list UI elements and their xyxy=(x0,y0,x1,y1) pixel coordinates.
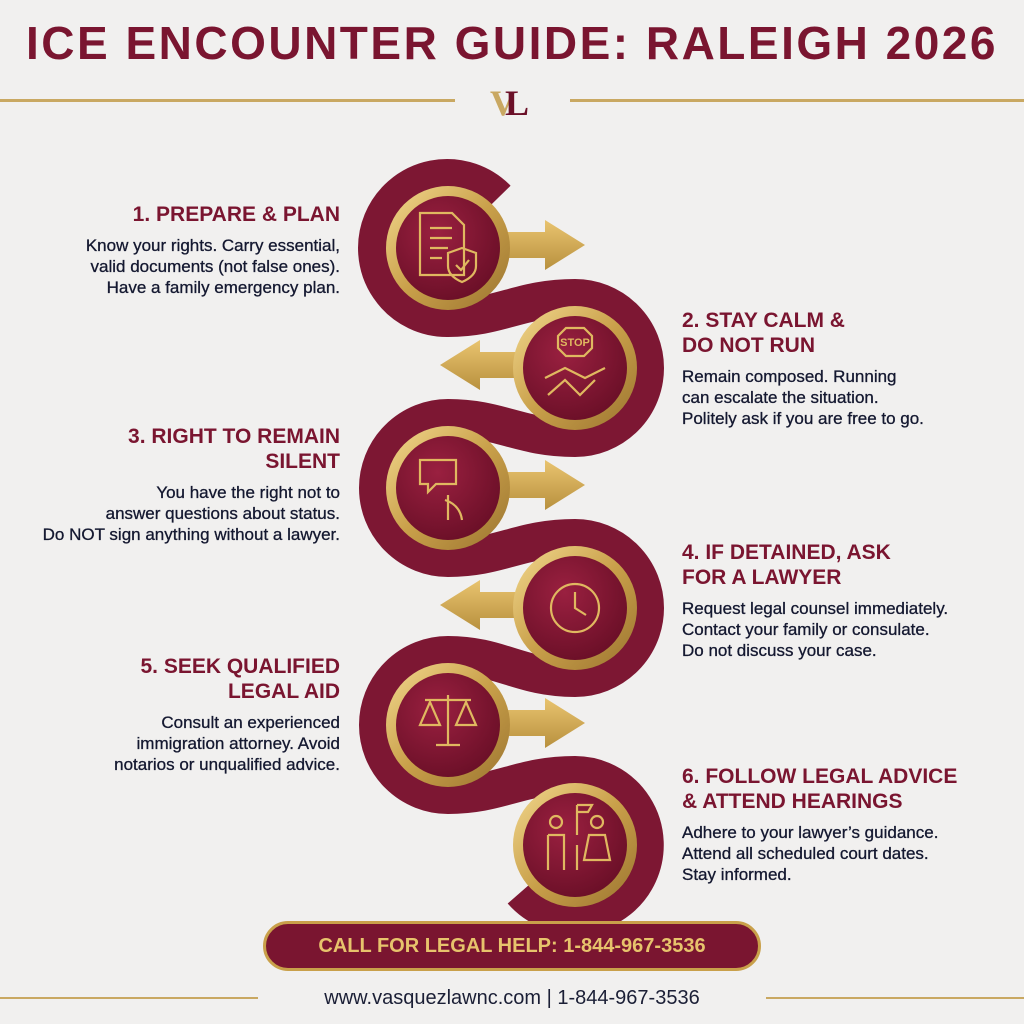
step 4 text: Contact your family or consulate. xyxy=(682,620,930,639)
step 2 text xyxy=(682,309,924,428)
step 2 text: Politely ask if you are free to go. xyxy=(682,409,924,428)
step 4 text: Do not discuss your case. xyxy=(682,641,877,660)
step 3 text: You have the right not to xyxy=(156,483,340,502)
title: ICE ENCOUNTER GUIDE: RALEIGH 2026 xyxy=(26,17,998,69)
step 2 text: can escalate the situation. xyxy=(682,388,879,407)
step 6 text: Attend all scheduled court dates. xyxy=(682,844,929,863)
step 1 text: Know your rights. Carry essential, xyxy=(86,236,340,255)
step 2 text: Remain composed. Running xyxy=(682,367,897,386)
icons xyxy=(420,213,610,870)
step 6 text: 6. FOLLOW LEGAL ADVICE xyxy=(682,765,957,788)
step 4 text xyxy=(682,541,948,660)
ribbon xyxy=(377,178,645,915)
step 4 text: 4. IF DETAINED, ASK xyxy=(682,541,891,564)
step 5 text xyxy=(114,655,340,774)
call button: CALL FOR LEGAL HELP: 1-844-967-3536 xyxy=(318,935,706,957)
footer: www.vasquezlawnc.com | 1-844-967-3536 xyxy=(324,987,700,1009)
step 1 text: valid documents (not false ones). xyxy=(91,257,340,276)
step 3 text: 3. RIGHT TO REMAIN xyxy=(128,425,340,448)
step 4 text: Request legal counsel immediately. xyxy=(682,599,948,618)
step 2 text: 2. STAY CALM & xyxy=(682,309,845,332)
step 3 text: answer questions about status. xyxy=(106,504,340,523)
step 1 text: 1. PREPARE & PLAN xyxy=(133,203,340,226)
step 5 text: Consult an experienced xyxy=(161,713,340,732)
step 5 text: immigration attorney. Avoid xyxy=(137,734,340,753)
step 5 text: 5. SEEK QUALIFIED xyxy=(140,655,340,678)
arrows xyxy=(440,220,585,748)
step 5 text: LEGAL AID xyxy=(228,680,340,703)
logo divider xyxy=(0,83,1024,123)
logo VL: VL xyxy=(490,83,529,123)
step 6 text: & ATTEND HEARINGS xyxy=(682,790,902,813)
step 1 text: Have a family emergency plan. xyxy=(107,278,340,297)
step 2 text: DO NOT RUN xyxy=(682,334,815,357)
flow diagram: STOP xyxy=(560,337,590,349)
step 6 text: Adhere to your lawyer’s guidance. xyxy=(682,823,938,842)
step 3 text xyxy=(43,425,340,544)
step 6 text: Stay informed. xyxy=(682,865,792,884)
step 5 text: notarios or unqualified advice. xyxy=(114,755,340,774)
call button xyxy=(263,921,761,971)
step 6 text xyxy=(682,765,957,884)
step circles xyxy=(386,186,637,907)
step 4 text: FOR A LAWYER xyxy=(682,566,841,589)
step 1 text xyxy=(86,203,340,297)
step 3 text: Do NOT sign anything without a lawyer. xyxy=(43,525,340,544)
step 3 text: SILENT xyxy=(265,450,340,473)
